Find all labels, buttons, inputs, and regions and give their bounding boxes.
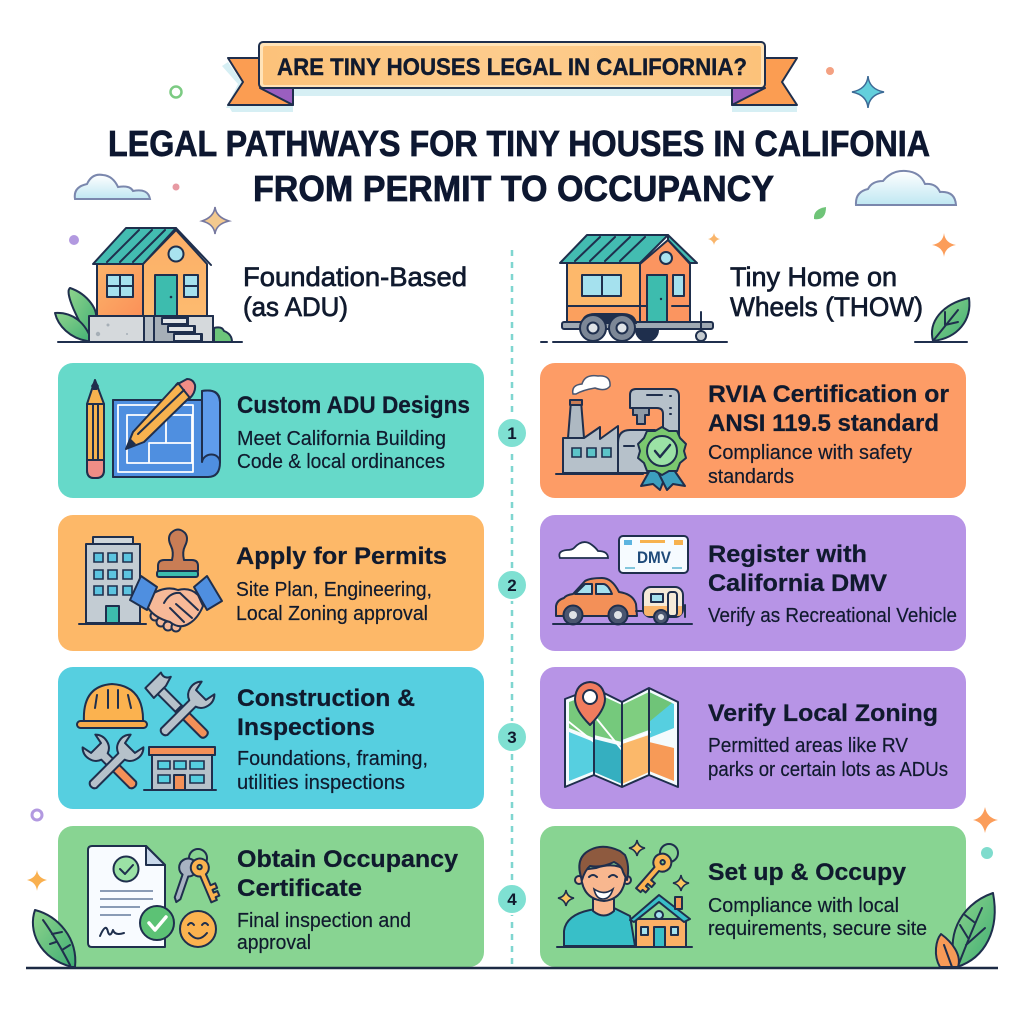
ground line <box>26 967 998 969</box>
icon: folded map with pin <box>565 682 678 787</box>
illustration: tiny home on wheels <box>541 235 727 342</box>
text: custom ADU designs: Code & local ordinances <box>237 451 445 473</box>
center dotted divider <box>511 250 513 966</box>
panel: construction and inspections <box>58 667 484 809</box>
text: set up and occupy <box>708 859 927 940</box>
step marker 3 <box>497 722 527 752</box>
icon: hard hat, tools and building <box>77 670 218 796</box>
text: set up and occupy: requirements, secure site <box>708 918 927 940</box>
text: register with DMV: Register with <box>708 541 867 568</box>
text: obtain occupancy certificate: approval <box>237 932 311 954</box>
cloud left <box>75 175 150 199</box>
text: register with DMV: Verify as Recreational Vehicle <box>708 605 957 627</box>
heading: foundation-based: (as ADU) <box>243 292 348 322</box>
banner: are tiny houses legal <box>222 42 797 112</box>
cloud right <box>856 171 956 205</box>
step marker 1 <box>497 418 527 448</box>
main title <box>108 123 930 209</box>
text: apply for permits <box>236 543 447 625</box>
panel: obtain occupancy certificate <box>58 826 484 967</box>
step marker 4 <box>497 884 527 914</box>
main title: FROM PERMIT TO OCCUPANCY <box>253 168 774 209</box>
icon: pencil and blueprint <box>87 379 220 478</box>
text: verify local zoning <box>708 700 948 781</box>
icon: DMV plate, car and trailer: DMV <box>637 548 672 567</box>
panel: RVIA certification <box>540 363 966 498</box>
text: set up and occupy: Set up & Occupy <box>708 859 906 886</box>
step marker 3: 3 <box>507 728 517 747</box>
text: custom ADU designs: Custom ADU Designs <box>237 392 470 419</box>
step marker 4: 4 <box>507 890 517 909</box>
heading: tiny home on wheels: Wheels (THOW) <box>730 292 923 322</box>
text: register with DMV <box>708 541 957 627</box>
illustration: foundation house <box>55 228 242 342</box>
text: set up and occupy: Compliance with local <box>708 895 899 917</box>
decorative sparkles and dots, bottom <box>27 807 998 891</box>
text: verify local zoning: Permitted areas like RV <box>708 735 909 757</box>
text: construction and inspections: Construction & <box>237 685 415 712</box>
icon: happy owner, key and house <box>557 840 692 947</box>
icon: factory and certified badge <box>556 376 686 490</box>
main title: LEGAL PATHWAYS FOR TINY HOUSES IN CALIFONIA <box>108 123 930 164</box>
text: RVIA certification: RVIA Certification or <box>708 381 949 408</box>
text: construction and inspections: utilities inspections <box>237 772 405 794</box>
text: construction and inspections: Inspections <box>237 714 375 741</box>
leaf: right of header <box>915 298 969 342</box>
text: RVIA certification: Compliance with safety <box>708 442 912 464</box>
leaf: bottom right <box>936 893 995 967</box>
icon: building, stamp and handshake <box>79 530 222 632</box>
step marker 2 <box>497 570 527 600</box>
banner: are tiny houses legal: ARE TINY HOUSES LEGAL IN CALIFORNIA? <box>277 54 747 81</box>
text: obtain occupancy certificate: Final inspection and <box>237 910 411 932</box>
text: RVIA certification: standards <box>708 466 794 488</box>
heading: foundation-based <box>243 262 467 322</box>
text: construction and inspections <box>237 685 428 794</box>
text: verify local zoning: parks or certain lots as ADUs <box>708 759 948 781</box>
icon: certificate, keys and smile <box>88 846 222 947</box>
text: apply for permits: Local Zoning approval <box>236 603 428 625</box>
step marker 1: 1 <box>507 424 517 443</box>
text: apply for permits: Site Plan, Engineering, <box>236 579 432 601</box>
decorative sparkles and dots, top <box>69 67 956 257</box>
icon: DMV plate, car and trailer <box>553 536 692 624</box>
heading: foundation-based: Foundation-Based <box>243 262 467 292</box>
panel: register with DMV <box>540 515 966 651</box>
text: verify local zoning: Verify Local Zoning <box>708 700 938 727</box>
text: obtain occupancy certificate <box>237 846 458 954</box>
text: construction and inspections: Foundations, framing, <box>237 748 428 770</box>
step marker 2: 2 <box>507 576 517 595</box>
panel: custom ADU designs <box>58 363 484 498</box>
text: custom ADU designs: Meet California Building <box>237 428 446 450</box>
heading: tiny home on wheels <box>730 262 923 322</box>
text: RVIA certification: ANSI 119.5 standard <box>708 410 939 437</box>
panel: verify local zoning <box>540 667 966 809</box>
text: custom ADU designs <box>237 392 470 473</box>
panel: apply for permits <box>58 515 484 651</box>
text: obtain occupancy certificate: Obtain Occupancy <box>237 846 458 873</box>
text: register with DMV: California DMV <box>708 570 888 597</box>
heading: tiny home on wheels: Tiny Home on <box>730 262 897 292</box>
text: apply for permits: Apply for Permits <box>236 543 447 570</box>
panel: set up and occupy <box>540 826 966 967</box>
leaf: bottom left <box>33 910 75 967</box>
text: RVIA certification <box>708 381 949 488</box>
text: obtain occupancy certificate: Certificate <box>237 875 362 902</box>
